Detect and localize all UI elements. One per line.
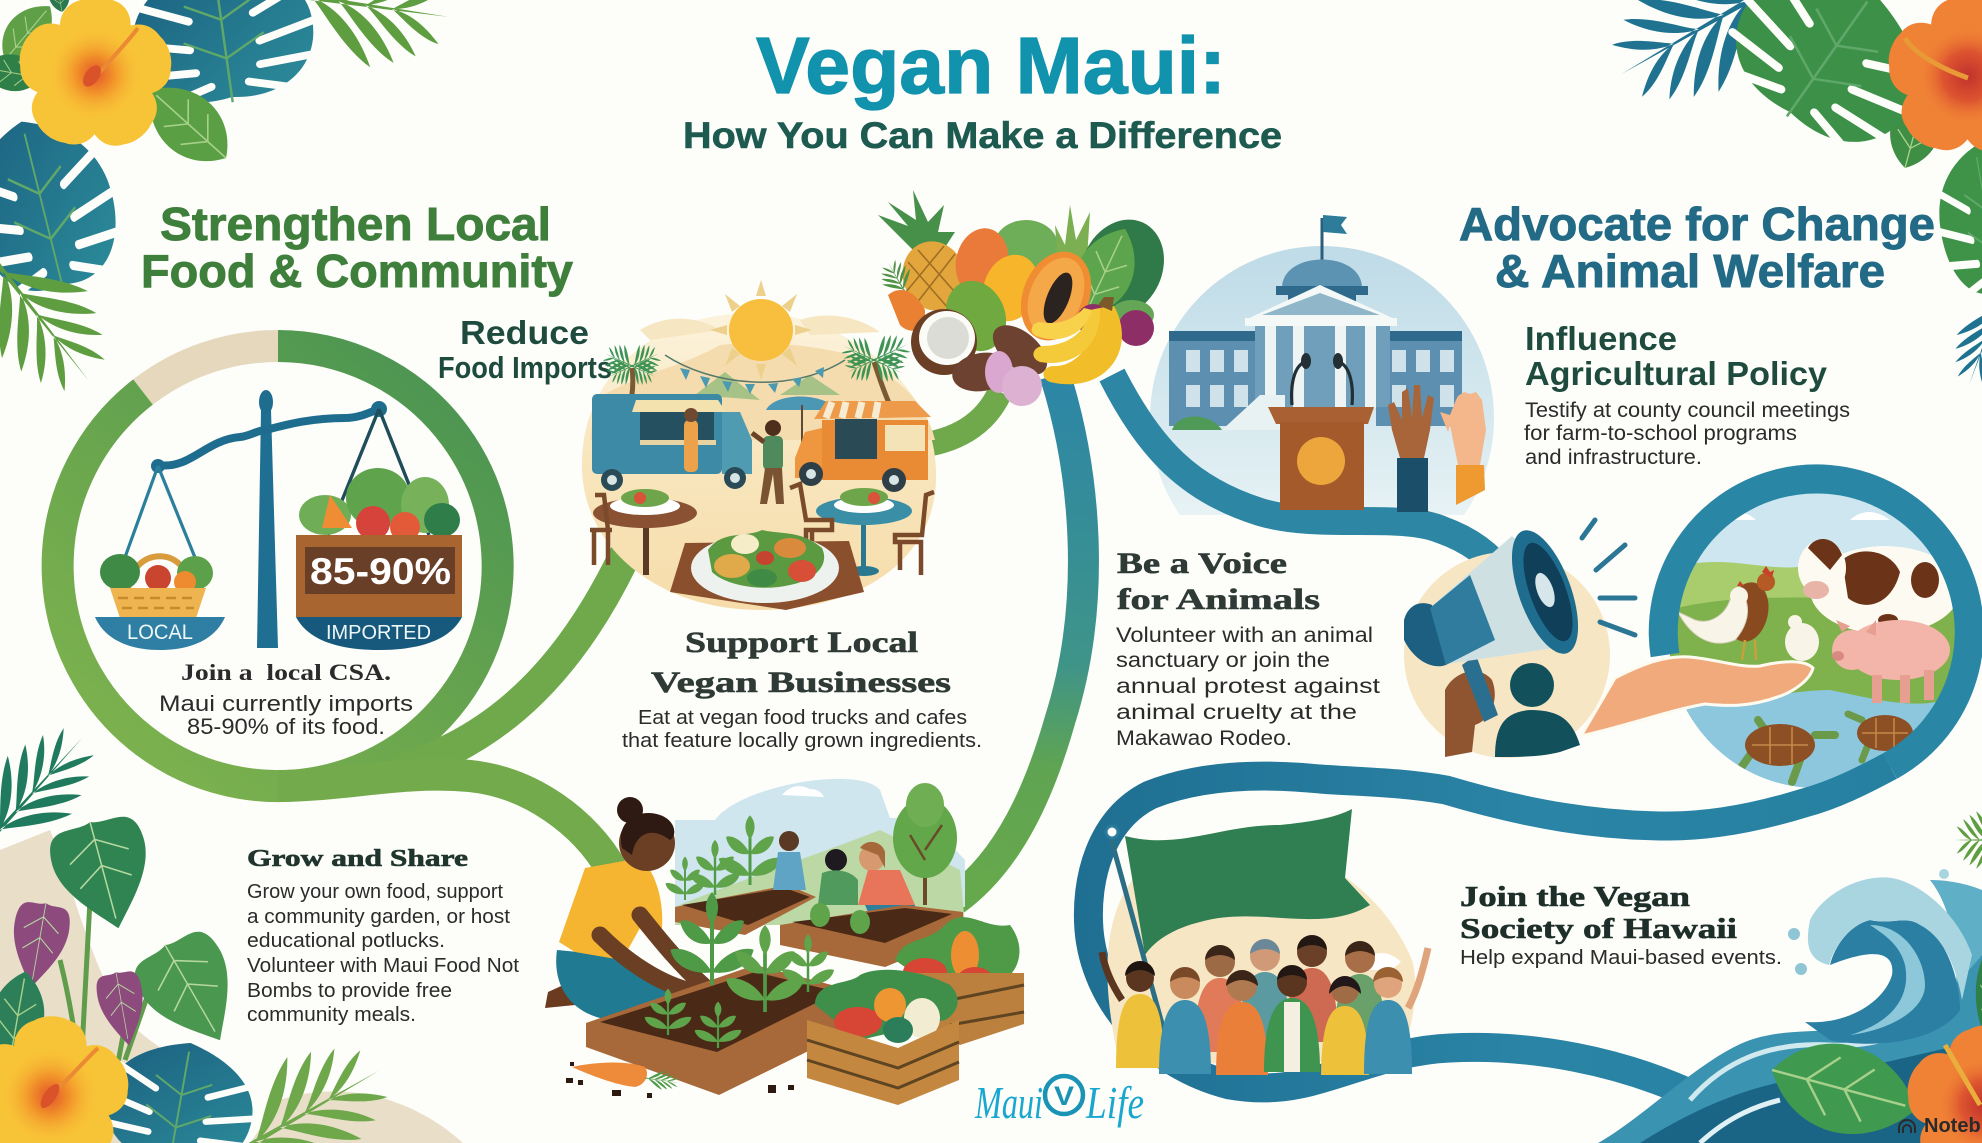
hen <box>1678 581 1748 643</box>
text: grow and share: Grow your own food, support <box>247 881 503 903</box>
illustration: fruit and vegetable bouquet <box>874 190 1179 406</box>
tree <box>893 783 957 905</box>
label imported: IMPORTED <box>326 622 431 644</box>
hand holding handle <box>1445 671 1495 757</box>
heading: advocate for change and animal welfare: Advocate for Change <box>1459 198 1935 250</box>
bunting <box>665 355 845 394</box>
bananas <box>1032 297 1122 384</box>
front crate with vegetables <box>807 970 959 1105</box>
papaya <box>1008 241 1104 351</box>
text: be a voice for animals: Volunteer with an animal <box>1116 624 1373 647</box>
text: support local vegan businesses: Eat at vegan food trucks and cafes <box>638 707 967 729</box>
cow <box>1798 539 1960 634</box>
text: grow and share: a community garden, or host <box>247 906 510 928</box>
market umbrella <box>766 396 836 470</box>
green path: ring to garden <box>278 775 612 870</box>
pineapple <box>878 190 974 319</box>
left pan basket <box>100 554 213 618</box>
text: join a local CSA: Join a local CSA. <box>181 660 391 685</box>
heading: strengthen local food and community: Strengthen Local <box>160 198 551 250</box>
heading: reduce food imports: Reduce <box>460 314 589 351</box>
mango red <box>949 223 1015 301</box>
right cafe table <box>790 484 934 576</box>
text: be a voice for animals: for Animals <box>1117 583 1320 616</box>
podium with microphones <box>1268 353 1374 510</box>
section title: How You Can Make a Difference <box>683 115 1282 156</box>
coconut <box>911 309 977 375</box>
text: influence agricultural policy <box>1524 320 1850 469</box>
text: influence agricultural policy: and infrastructure. <box>1525 446 1702 469</box>
watermark: NotebookLM <box>1899 1115 1981 1137</box>
carrot and herbs <box>874 255 925 331</box>
text: join the vegan society of hawaii: Join the Vegan <box>1460 881 1690 913</box>
logo: Maui V Life: Life <box>1085 1077 1144 1128</box>
imported crate <box>296 535 462 617</box>
illustration: vegan food trucks <box>582 280 936 610</box>
text: be a voice for animals: sanctuary or join the <box>1116 649 1330 672</box>
heading: reduce food imports <box>438 314 612 385</box>
logo: Maui V Life: Maui <box>974 1077 1043 1128</box>
back crate with vegetables <box>895 917 1024 1045</box>
section title <box>683 21 1282 156</box>
left cafe table <box>590 489 697 575</box>
text: be a voice for animals: animal cruelty at the <box>1116 701 1357 724</box>
purple vegetables <box>1077 304 1109 336</box>
heading: reduce food imports: Food Imports <box>438 350 612 385</box>
text: influence agricultural policy: Agricultural Policy <box>1525 355 1828 392</box>
gardener blue <box>773 831 806 890</box>
illustration: megaphone <box>1404 520 1635 758</box>
seedlings in box two <box>666 815 781 900</box>
heading: advocate for change and animal welfare: & Animal Welfare <box>1495 245 1885 297</box>
silhouette of speaker <box>1495 663 1580 757</box>
text: grow and share: Bombs to provide free <box>247 980 452 1002</box>
sound lines <box>1582 520 1635 635</box>
logo: Maui V Life: V <box>1054 1081 1074 1111</box>
pig <box>1832 620 1950 703</box>
illustration: community with flag <box>1102 809 1428 1080</box>
green mango <box>936 272 1016 360</box>
text: join a local CSA <box>159 660 413 739</box>
leafy greens <box>994 205 1179 330</box>
megaphone cone <box>1425 536 1575 665</box>
carrot on the ground <box>572 1062 681 1092</box>
big raised bed <box>586 965 851 1095</box>
teal path: fruit to megaphone <box>1112 375 1504 575</box>
text: influence agricultural policy: Influence <box>1525 320 1677 357</box>
text: grow and share: educational potlucks. <box>247 930 445 952</box>
right pan vegetables <box>299 468 460 542</box>
text: support local vegan businesses: Support Local <box>685 626 918 659</box>
turtle small <box>1848 714 1918 760</box>
text: support local vegan businesses <box>622 626 982 752</box>
woman planting <box>545 797 706 1018</box>
illustration: community garden <box>545 779 1024 1105</box>
box three <box>780 903 963 967</box>
progress ring: local food <box>58 346 498 786</box>
raised hands <box>1388 385 1486 512</box>
text: join the vegan society of hawaii <box>1460 881 1782 969</box>
text: be a voice for animals <box>1116 547 1380 750</box>
green path: ring to food trucks <box>395 540 632 772</box>
text: influence agricultural policy: for farm-to-school programs <box>1524 422 1797 445</box>
orange food truck <box>795 401 931 492</box>
text: influence agricultural policy: Testify at county council meetings <box>1525 399 1850 422</box>
crowd of people <box>1102 935 1428 1080</box>
logo: Maui V Life <box>974 1076 1144 1128</box>
customer <box>752 420 784 504</box>
illustration: animals sanctuary <box>1581 479 1970 800</box>
text: grow and share: Grow and Share <box>247 846 468 872</box>
foliage: top left corner <box>0 0 457 414</box>
heading: strengthen local food and community <box>141 198 573 297</box>
flag <box>1106 809 1370 1060</box>
ring around animals <box>1663 479 1969 766</box>
text: join a local CSA: Maui currently imports <box>159 691 413 716</box>
section title: Vegan Maui: <box>756 21 1226 110</box>
right pan <box>296 617 462 650</box>
text: grow and share <box>247 846 519 1026</box>
sun <box>710 280 812 380</box>
text: be a voice for animals: Makawao Rodeo. <box>1116 727 1292 750</box>
soil crumbs <box>566 1062 794 1098</box>
green path: trucks to fruit <box>915 392 1000 446</box>
mango yellow <box>974 247 1048 329</box>
teal path: animals ring to flag circle and wave <box>1088 766 1890 1098</box>
label local: LOCAL <box>127 621 193 644</box>
text: join a local CSA: 85-90% of its food. <box>187 714 385 739</box>
text: be a voice for animals: annual protest against <box>1116 675 1380 698</box>
watermark: NotebookLM: Noteb <box>1924 1115 1981 1137</box>
text: support local vegan businesses: that feature locally grown ingredients. <box>622 730 982 752</box>
teal to green path: fruit to garden <box>955 375 1083 900</box>
palm trees <box>598 328 916 412</box>
chick <box>1785 615 1819 661</box>
illustration: capitol building <box>1150 215 1494 515</box>
text: join the vegan society of hawaii: Society of Hawaii <box>1460 913 1737 945</box>
scales icon <box>95 390 462 650</box>
wave crest <box>1805 920 1960 1044</box>
gardener green <box>818 849 858 905</box>
text: grow and share: community meals. <box>247 1004 416 1026</box>
text: grow and share: Volunteer with Maui Food Not <box>247 955 519 977</box>
featured plate of food <box>670 530 864 610</box>
turtle large <box>1738 720 1835 782</box>
box two <box>675 885 816 935</box>
seedlings in big bed <box>645 892 834 1048</box>
blue food truck <box>592 394 752 491</box>
ocean wave <box>1598 869 1982 1143</box>
gardener coral <box>858 842 915 935</box>
left pan <box>95 617 225 650</box>
taro roots <box>949 316 1056 406</box>
foliage: bottom right corner <box>1761 811 1982 1143</box>
text: be a voice for animals: Be a Voice <box>1117 547 1287 580</box>
helping hand <box>1581 657 1813 736</box>
imported crate: 85-90% <box>310 551 451 592</box>
rooster <box>1736 566 1775 660</box>
text: join the vegan society of hawaii: Help expand Maui-based events. <box>1460 947 1782 969</box>
heading: strengthen local food and community: Food & Community <box>141 245 573 297</box>
foliage: top right corner <box>1589 0 1982 394</box>
heading: advocate for change and animal welfare <box>1459 198 1935 297</box>
foliage: bottom left corner <box>0 709 463 1143</box>
text: support local vegan businesses: Vegan Businesses <box>651 666 951 699</box>
